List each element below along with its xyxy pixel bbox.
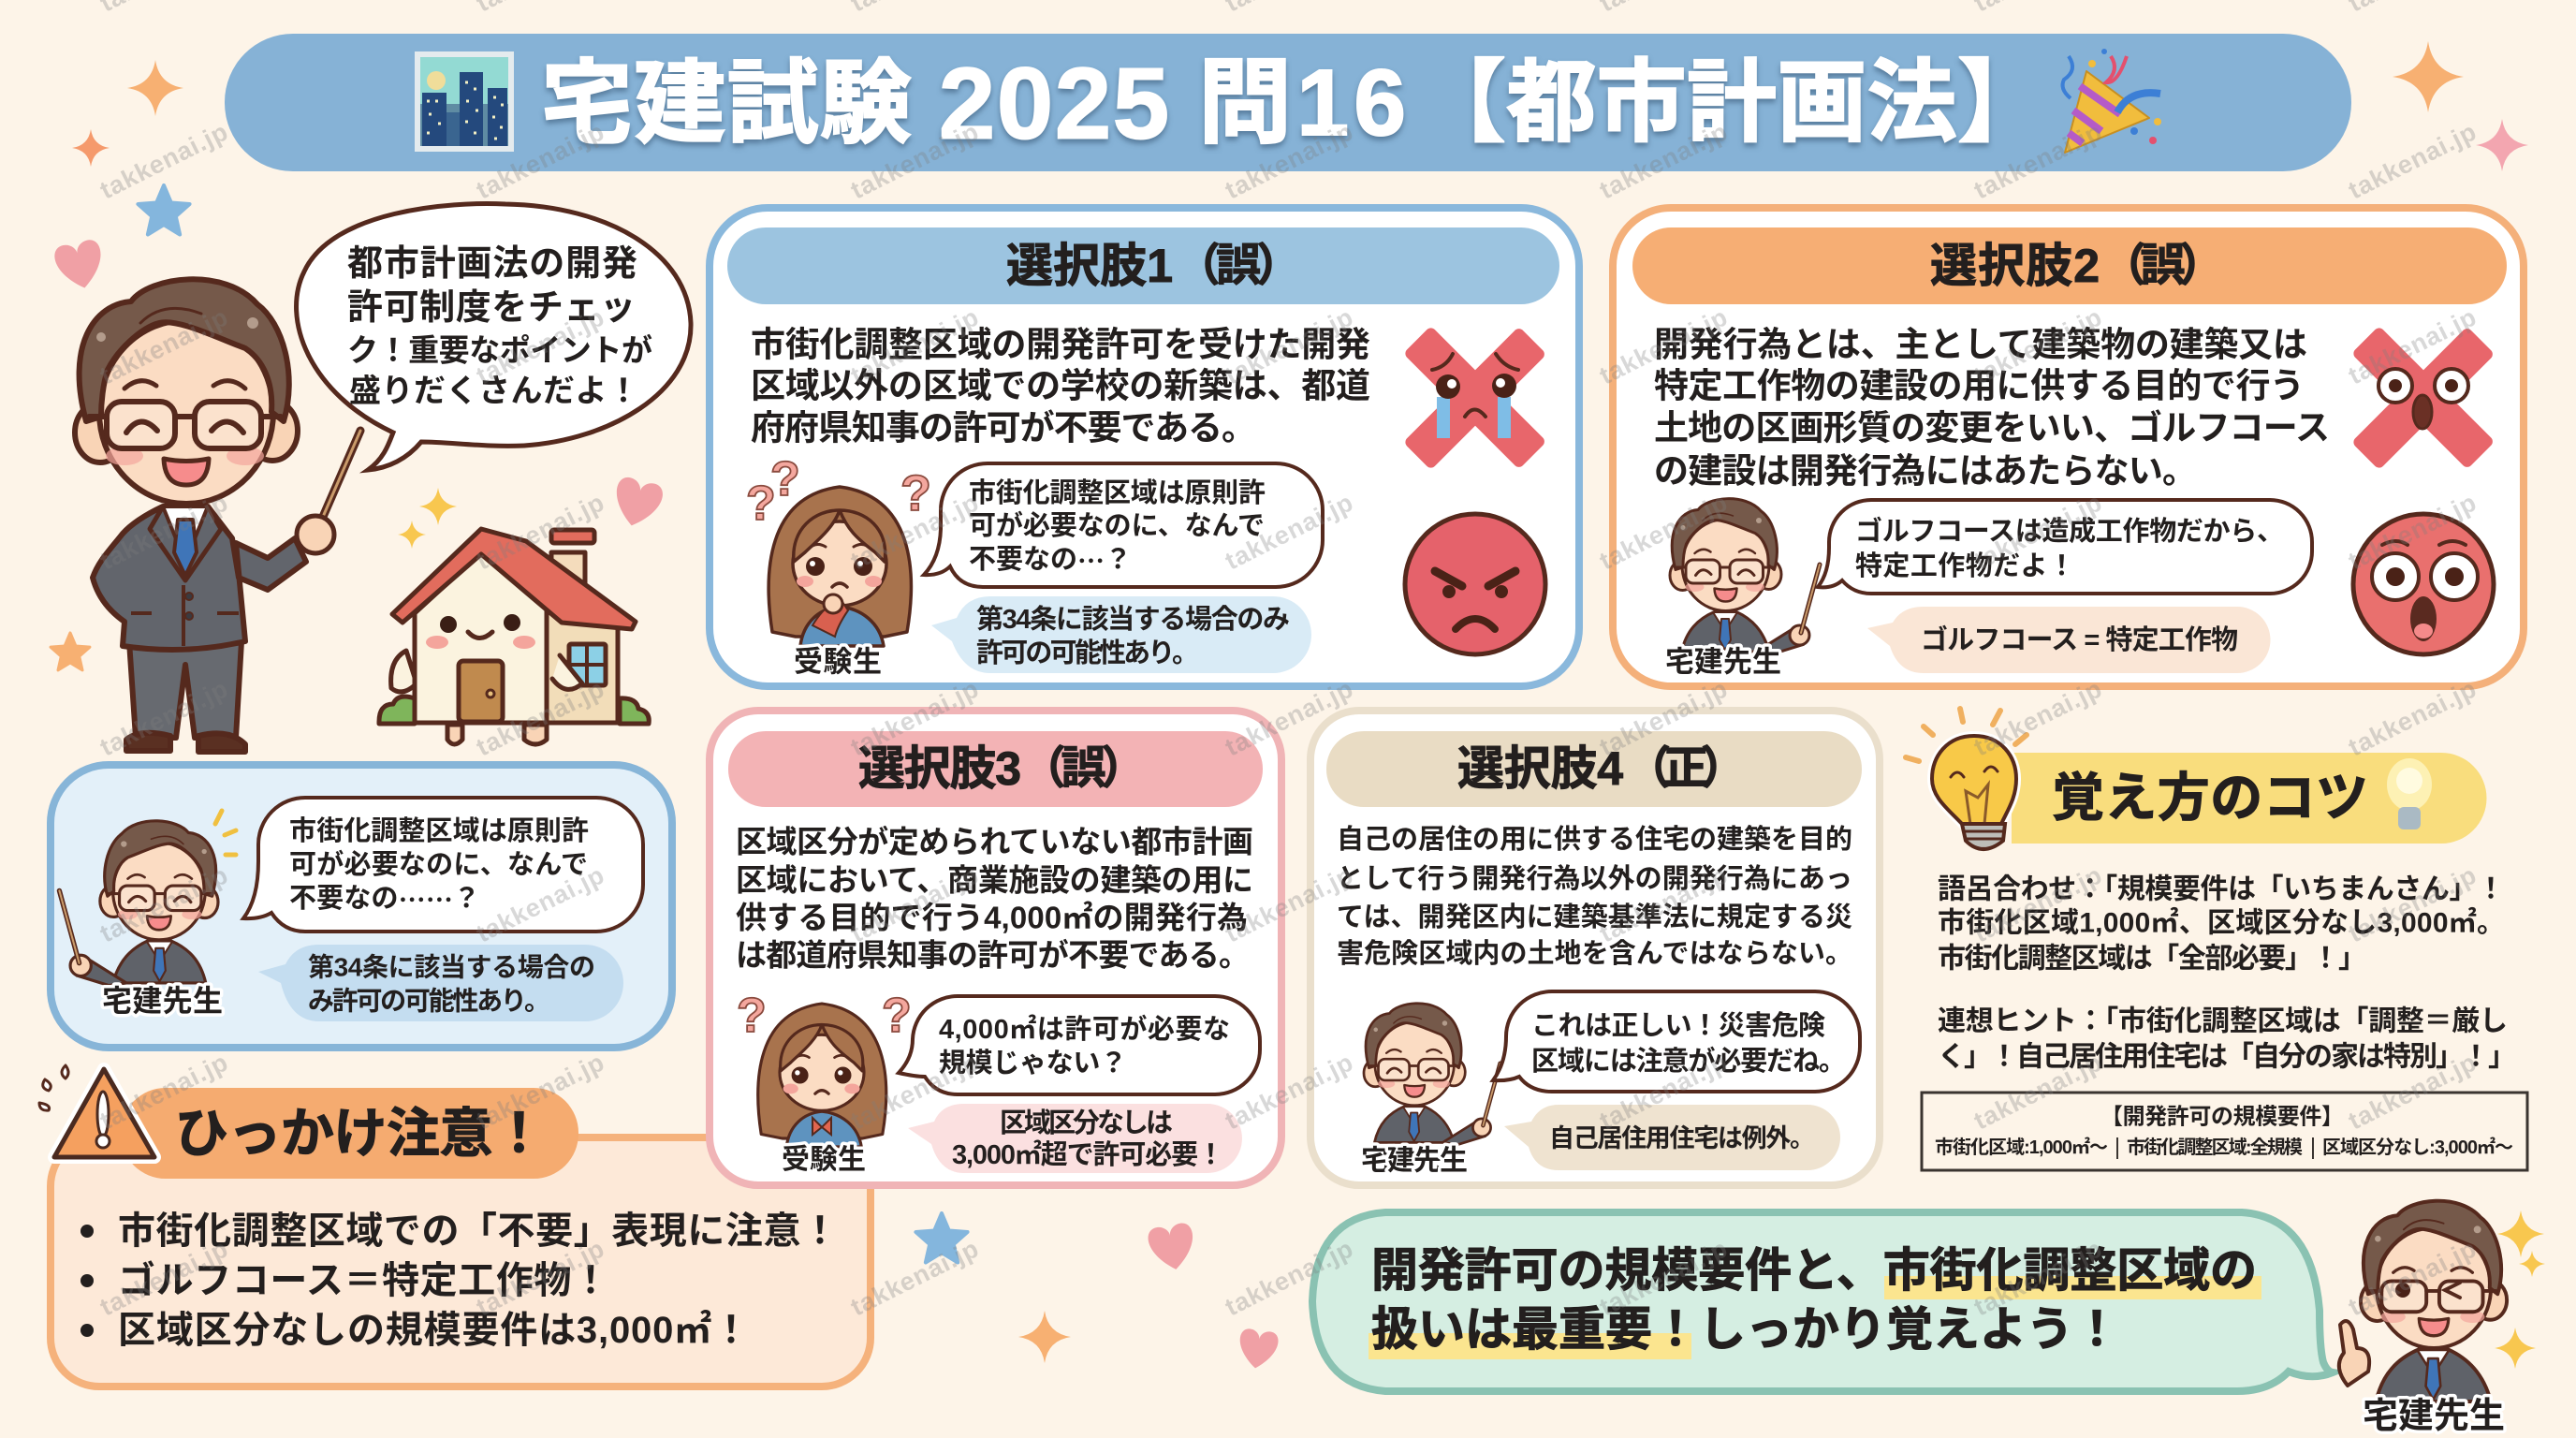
watermark grid: takkenai.jp (846, 489, 983, 575)
speech bubble: 可が必要なのに、なんで (289, 848, 588, 880)
association hint text: 連想ヒント：「市街化調整区域は「調整＝厳し (1938, 1005, 2508, 1037)
note pill (258, 945, 623, 1021)
icon: small bulb (2387, 758, 2432, 829)
watermark grid: takkenai.jp (846, 118, 983, 204)
statement: 府府県知事の許可が不要である。 (751, 408, 1256, 448)
watermark grid: takkenai.jp (1221, 675, 1357, 761)
watermark grid: takkenai.jp (1595, 675, 1732, 761)
watermark grid: takkenai.jp (1969, 303, 2106, 389)
speech bubble: 規模じゃない？ (939, 1048, 1127, 1078)
watermark grid: takkenai.jp (2344, 861, 2481, 947)
size requirement box: 市街化区域:1,000㎡～ (1935, 1137, 2108, 1158)
watermark grid: takkenai.jp (1595, 489, 1732, 575)
closing message (1371, 1244, 2257, 1356)
heading (727, 227, 1559, 304)
watermark grid: takkenai.jp (1595, 303, 1732, 389)
watermark grid: takkenai.jp (1969, 1049, 2106, 1135)
label: 宅建先生 (1665, 646, 1781, 678)
size requirement box: 市街化調整区域:全規模 (2127, 1137, 2303, 1158)
watermark grid: takkenai.jp (1221, 303, 1357, 389)
icon: party popper (2063, 49, 2161, 153)
heading (1326, 731, 1862, 807)
icon: city (417, 54, 511, 149)
icon: smiling house (379, 529, 649, 744)
speech bubble: 市街化調整区域は原則許 (969, 477, 1266, 508)
statement: 区域区分が定められていない都市計画 (736, 824, 1253, 859)
bullet list: 区域区分なしの規模要件は3,000㎡！ (118, 1310, 750, 1351)
statement: 開発行為とは、主として建築物の建築又は (1654, 326, 2307, 363)
note pill: 許可の可能性あり。 (976, 638, 1199, 668)
icon: warning triangle (39, 1065, 154, 1157)
label: 受験生 (794, 646, 882, 678)
heading pill (2012, 753, 2486, 844)
watermark grid: takkenai.jp (1969, 675, 2106, 761)
title text: 問16 (1198, 51, 1406, 155)
student illustration: ? (737, 989, 767, 1043)
heading pill: 覚え方のコツ (2052, 768, 2368, 828)
panel: choice 2 (1613, 208, 2524, 686)
watermark grid: takkenai.jp (1221, 489, 1357, 575)
mnemonic text: 語呂合わせ：「規模要件は「いちまんさん」！ (1938, 874, 2505, 904)
statement: の建設は開発行為にはあたらない。 (1654, 451, 2197, 491)
heading (728, 731, 1263, 807)
icon: surprised cross (2351, 326, 2495, 470)
teacher illustration (1670, 499, 1820, 653)
title banner (225, 34, 2351, 171)
title text: 2025 (939, 47, 1169, 159)
speech bubble (243, 798, 643, 932)
statement: 害危険区域内の土地を含んではならない。 (1337, 938, 1852, 969)
note pill (931, 596, 1311, 673)
watermark grid: takkenai.jp (2344, 303, 2481, 389)
speech bubble (1818, 500, 2312, 594)
student illustration: ? (882, 989, 912, 1043)
note pill: 第34条に該当する場合の (308, 953, 595, 981)
note pill: 自己居住用住宅は例外。 (1549, 1124, 1815, 1152)
closing speech bubble (1312, 1212, 2333, 1391)
mnemonic text (1938, 874, 2505, 974)
label: 受験生 (782, 1144, 866, 1176)
watermark grid: takkenai.jp (472, 118, 608, 204)
watermark grid: takkenai.jp (472, 303, 608, 389)
heading: （誤） (1176, 242, 1301, 290)
watermark grid: takkenai.jp (846, 675, 983, 761)
heading pill (121, 1088, 578, 1179)
watermark grid: takkenai.jp (95, 489, 232, 575)
statement: として行う開発行為以外の開発行為にあっ (1337, 863, 1852, 894)
panel: choice 3 (710, 711, 1281, 1185)
speech bubble: 特定工作物だよ！ (1855, 550, 2075, 581)
heading: （正） (1626, 743, 1746, 794)
statement (736, 824, 1253, 972)
watermark grid: takkenai.jp (1221, 118, 1357, 204)
big teacher illustration (75, 279, 360, 752)
watermark grid: takkenai.jp (95, 861, 232, 947)
association hint text: く」！自己居住用住宅は「自分の家は特別」！」 (1938, 1041, 2516, 1073)
watermark grid: takkenai.jp (1969, 861, 2106, 947)
icon: shocked face (2353, 514, 2494, 654)
watermark grid: takkenai.jp (472, 861, 608, 947)
size requirement box (1922, 1093, 2527, 1170)
note pill: 3,000㎡超で許可必要！ (952, 1139, 1224, 1170)
student illustration (746, 452, 931, 646)
student illustration: ? (770, 452, 800, 506)
teacher illustration (1364, 1004, 1500, 1145)
watermark grid: takkenai.jp (1595, 1049, 1732, 1135)
watermark grid: takkenai.jp (1595, 861, 1732, 947)
statement: ては、開発区内に建築基準法に規定する災 (1337, 902, 1852, 932)
note pill (1867, 607, 2271, 673)
heading: （誤） (2101, 242, 2224, 290)
icon: angry face (1405, 514, 1545, 654)
note pill: ゴルフコース = 特定工作物 (1921, 624, 2238, 655)
watermark grid: takkenai.jp (1221, 1049, 1357, 1135)
speech bubble: 市街化調整区域は原則許 (289, 815, 589, 846)
watermark grid: takkenai.jp (1969, 118, 2106, 204)
heading: 選択肢3 (858, 742, 1021, 795)
note pill: み許可の可能性あり。 (308, 987, 550, 1015)
watermark grid: takkenai.jp (846, 303, 983, 389)
bullet list: ゴルフコース＝特定工作物！ (118, 1260, 609, 1301)
statement: 自己の居住の用に供する住宅の建築を目的 (1337, 824, 1852, 855)
watermark grid: takkenai.jp (1595, 118, 1732, 204)
bullet list: 市街化調整区域での「不要」表現に注意！ (118, 1211, 839, 1252)
statement (751, 326, 1370, 448)
speech bubble: intro: 許可制度をチェッ (347, 288, 636, 328)
speech bubble: 4,000㎡は許可が必要な (939, 1013, 1230, 1045)
speech bubble: 可が必要なのに、なんで (969, 509, 1265, 541)
watermark grid: takkenai.jp (1221, 861, 1357, 947)
watermark grid: takkenai.jp (1221, 1235, 1357, 1321)
watermark grid: takkenai.jp (472, 1235, 608, 1321)
watermark grid: takkenai.jp (95, 1235, 232, 1321)
title text (541, 47, 2047, 159)
heading (1632, 227, 2507, 304)
student illustration: ? (746, 477, 776, 531)
size requirement box: 区域区分なし:3,000㎡～ (2322, 1137, 2513, 1158)
watermark grid: takkenai.jp (1969, 1235, 2106, 1321)
icon: smiling bulb (1906, 709, 2027, 849)
watermark grid: takkenai.jp (1595, 1235, 1732, 1321)
heading: 選択肢4 (1457, 742, 1623, 795)
watermark grid: takkenai.jp (95, 1049, 232, 1135)
panel: teacher note (51, 765, 672, 1048)
panel: trap warning (39, 1065, 871, 1387)
highlight (1368, 1333, 1691, 1359)
panel: memory tips (1906, 709, 2527, 1170)
heading: 選択肢2 (1930, 240, 2100, 292)
watermark grid: takkenai.jp (846, 1049, 983, 1135)
panel: choice 4 (1310, 711, 1880, 1185)
watermark grid: takkenai.jp (95, 118, 232, 204)
watermark grid: takkenai.jp (2344, 118, 2481, 204)
statement (1337, 824, 1852, 969)
icon: crying cross (1403, 326, 1546, 470)
heading: （誤） (1021, 743, 1146, 794)
speech bubble: intro: ク！重要なポイントが (347, 333, 652, 367)
label: 宅建先生 (102, 984, 223, 1018)
mnemonic text: 市街化調整区域は「全部必要」！」 (1938, 944, 2366, 974)
speech bubble (899, 996, 1260, 1094)
statement: は都道府県知事の許可が不要である。 (736, 938, 1250, 972)
watermark grid: takkenai.jp (2344, 1049, 2481, 1135)
speech bubble: 不要なの……？ (289, 879, 480, 918)
winking teacher illustration (2339, 1201, 2507, 1401)
watermark grid: takkenai.jp (1969, 489, 2106, 575)
statement: 供する目的で行う4,000㎡の開発行為 (736, 901, 1248, 934)
speech bubble: 区域には注意が必要だね。 (1531, 1045, 1846, 1077)
speech bubble: これは正しい！災害危険 (1531, 1010, 1825, 1041)
speech bubble: intro (297, 204, 691, 470)
watermark grid: takkenai.jp (472, 489, 608, 575)
bullet list (80, 1211, 839, 1351)
speech bubble (1493, 991, 1860, 1092)
watermark grid: takkenai.jp (472, 675, 608, 761)
title text: 【都市計画法】 (1416, 52, 2047, 154)
statement (1654, 326, 2330, 491)
speech bubble: 不要なの…？ (969, 540, 1132, 580)
watermark grid: takkenai.jp (95, 675, 232, 761)
speech bubble: ゴルフコースは造成工作物だから、 (1855, 515, 2284, 547)
statement: 区域において、商業施設の建築の用に (736, 863, 1253, 897)
note pill (908, 1104, 1242, 1173)
highlight (1884, 1276, 2261, 1299)
watermark grid: takkenai.jp (2344, 1235, 2481, 1321)
statement: 特定工作物の建設の用に供する目的で行う (1654, 367, 2305, 404)
label: 宅建先生 (2363, 1397, 2505, 1436)
watermark grid: takkenai.jp (846, 1235, 983, 1321)
student illustration: ? (900, 465, 931, 521)
heading: 選択肢1 (1006, 240, 1173, 292)
watermark grid: takkenai.jp (472, 1049, 608, 1135)
watermark grid: takkenai.jp (2344, 675, 2481, 761)
student illustration (737, 989, 912, 1147)
watermark grid: takkenai.jp (846, 861, 983, 947)
speech bubble: intro: 盛りだくさんだよ！ (349, 374, 639, 409)
watermark grid: takkenai.jp (2344, 489, 2481, 575)
note pill (1504, 1105, 1840, 1170)
speech bubble: intro: 都市計画法の開発 (347, 244, 637, 284)
statement: 市街化調整区域の開発許可を受けた開発 (751, 326, 1370, 363)
watermark grid: takkenai.jp (95, 303, 232, 389)
closing message: 扱いは最重要！しっかり覚えよう！ (1371, 1303, 2120, 1356)
speech bubble (924, 463, 1323, 587)
mnemonic text: 市街化区域1,000㎡、区域区分なし3,000㎡。 (1938, 908, 2505, 938)
label: 宅建先生 (1361, 1146, 1468, 1176)
heading pill: ひっかけ注意！ (175, 1104, 546, 1164)
note pill: 第34条に該当する場合のみ (976, 604, 1290, 635)
teacher illustration (59, 811, 236, 986)
title text: 宅建試験 (541, 51, 912, 154)
association hint text (1938, 1005, 2516, 1073)
panel: choice 1 (710, 208, 1579, 686)
statement: 区域以外の区域での学校の新築は、都道 (751, 367, 1370, 404)
closing message: 開発許可の規模要件と、市街化調整区域の (1371, 1244, 2257, 1297)
statement: 土地の区画形質の変更をいい、ゴルフコース (1654, 408, 2330, 448)
size requirement box: 【開発許可の規模要件】 (2100, 1105, 2344, 1129)
note pill: 区域区分なしは (1000, 1108, 1173, 1138)
